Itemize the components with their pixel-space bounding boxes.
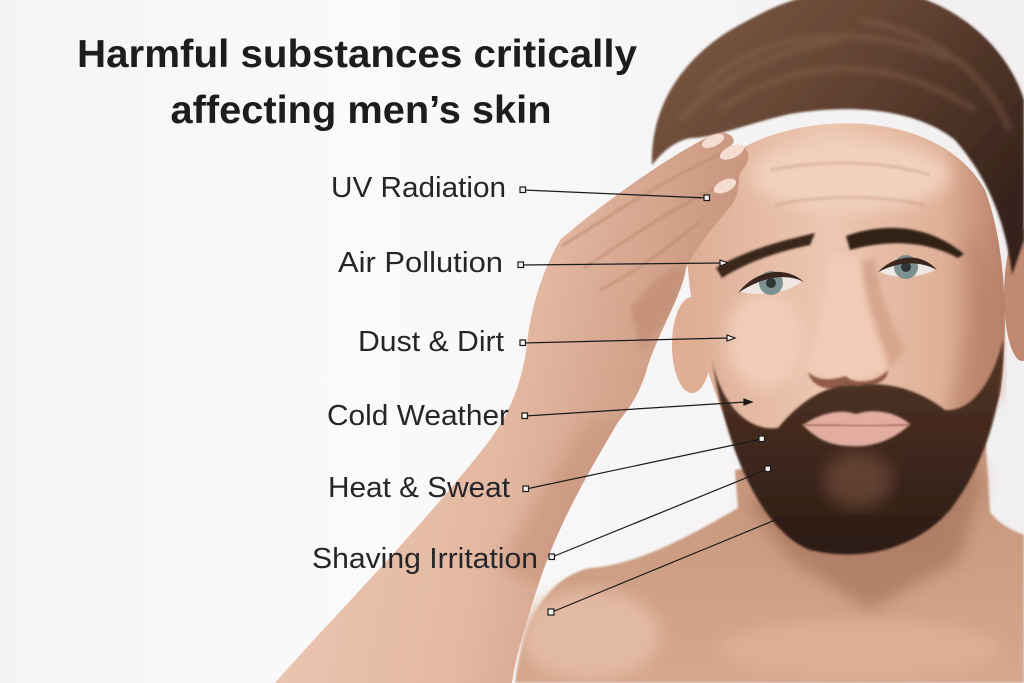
eyebrow right — [846, 228, 964, 258]
eyebrow left — [716, 233, 815, 278]
leader: Shaving Irritation — [549, 466, 770, 560]
chest light — [520, 590, 660, 680]
wrist shade — [503, 422, 618, 587]
face — [687, 123, 1005, 545]
forehead wrinkles — [770, 163, 930, 205]
label: Dust & Dirt: Dust & Dirt — [358, 326, 504, 358]
chest right light — [720, 620, 1000, 680]
hair strands — [680, 20, 1010, 130]
leader: Dust & Dirt — [520, 335, 735, 346]
eye left — [738, 271, 804, 295]
photo: man touching his forehead — [275, 0, 1024, 683]
leader lines — [518, 187, 780, 615]
label: UV Radiation: UV Radiation — [331, 172, 506, 204]
title — [77, 33, 637, 132]
forehead highlight — [750, 139, 950, 211]
arm shading, clipped to the arm — [500, 148, 738, 590]
side face shadow — [945, 230, 1001, 420]
nostril shadow — [808, 370, 888, 389]
fingernails — [700, 131, 746, 197]
leader: lower beard — [548, 518, 780, 615]
chin hair lighter — [823, 452, 893, 508]
ear right — [1004, 229, 1024, 361]
nose — [806, 255, 888, 380]
title: affecting men’s skin — [170, 89, 552, 132]
label: Air Pollution: Air Pollution — [338, 247, 503, 279]
title: Harmful substances critically — [77, 33, 637, 76]
eye right — [878, 255, 937, 279]
lip line — [803, 424, 910, 426]
thumb shadow — [630, 267, 686, 350]
label: Shaving Irritation: Shaving Irritation — [312, 543, 538, 575]
beard — [712, 340, 1003, 554]
leader: Cold Weather — [522, 399, 752, 418]
labels — [312, 172, 538, 575]
label: Cold Weather: Cold Weather — [327, 400, 509, 432]
leader: Air Pollution — [518, 260, 728, 268]
ear left — [672, 297, 712, 393]
leader: UV Radiation — [520, 187, 710, 200]
hair — [652, 0, 1024, 275]
finger creases — [562, 148, 738, 290]
label: Heat & Sweat: Heat & Sweat — [328, 472, 510, 504]
shoulders and chest — [515, 430, 1024, 683]
leader: Heat & Sweat — [523, 436, 764, 492]
nose bridge shadow — [862, 258, 905, 368]
arm and hand — [275, 133, 748, 683]
cheek highlight — [727, 292, 803, 388]
neck shadow — [745, 470, 985, 610]
lips — [803, 411, 910, 446]
